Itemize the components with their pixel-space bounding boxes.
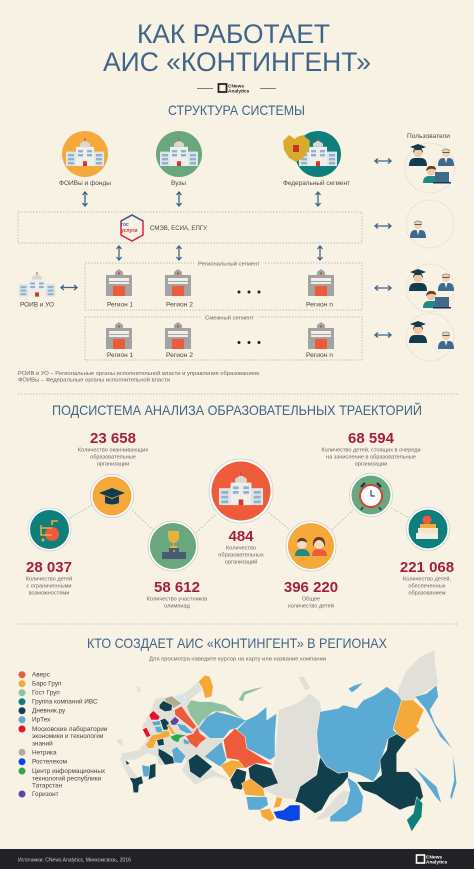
legend: Ростелеком	[32, 759, 67, 766]
map: western regions	[125, 675, 265, 793]
panel: adjacent segment	[85, 314, 362, 360]
arrow: adjacent users	[375, 332, 391, 338]
stat: children total: количество детей	[288, 602, 334, 610]
panel: adjacent segment: Регион 1	[107, 352, 133, 359]
legend: Татарстан	[32, 782, 63, 790]
stat: disabilities: Количество детей	[26, 576, 72, 582]
node: regional authorities	[19, 272, 55, 308]
map of Russia	[117, 650, 457, 832]
legend: Барс Груп	[32, 681, 62, 688]
users group: top	[405, 134, 455, 193]
legend: Группа компаний ИВС	[32, 698, 98, 706]
map: light blue regions	[198, 683, 457, 822]
map: dark regions	[230, 733, 423, 813]
subheading: map hint: Для просмотра наведите курсор на карту или название компании	[149, 656, 326, 662]
heading: regions: КТО СОЗДАЕТ АИС «КОНТИНГЕНТ» В РЕГИОНАХ	[87, 635, 388, 651]
footer: CNews	[426, 854, 442, 860]
stat: queue: 68 594	[348, 430, 395, 447]
title: АИС «КОНТИНГЕНТ»	[103, 47, 371, 77]
users group: adjacent	[406, 313, 454, 361]
arrow: regional users	[375, 286, 391, 290]
panel: regional segment: Регион 1	[107, 302, 133, 308]
legend: ИрТех	[32, 717, 51, 724]
footer: Analytics	[426, 860, 448, 866]
panel: adjacent segment: Регион n	[306, 352, 333, 359]
node: universities	[156, 131, 202, 187]
legend: Московские лаборатории	[32, 725, 108, 733]
stat: olympiad participants	[147, 521, 207, 610]
stat: graduates: образовательные	[90, 454, 136, 460]
users group: top: Пользователи	[407, 134, 450, 140]
stat: organizations	[209, 459, 273, 566]
panel: regional segment: Регион 2	[166, 302, 193, 308]
legend: экономики и технологии	[32, 733, 104, 740]
stat: provided with education	[400, 508, 454, 596]
stat: olympiad participants: олимпиад	[164, 604, 191, 610]
map: orange regions	[220, 700, 424, 822]
stat: graduates: 23 658	[90, 430, 136, 447]
node: universities: Вузы	[171, 181, 186, 187]
stat: provided with education: образованием	[408, 590, 446, 596]
title: КАК РАБОТАЕТ	[137, 19, 330, 49]
footnote: РОИВ и УО – Региональные органы исполнительной власти и управления образованием	[18, 370, 260, 377]
panel: integration box	[18, 212, 362, 243]
map: Tuva	[273, 805, 300, 822]
arrow: regional authorities	[61, 285, 77, 290]
logo: CNews Analytics: Analytics	[228, 88, 250, 94]
node: regional authorities: РОИВ и УО	[20, 302, 54, 308]
heading: trajectories: ПОДСИСТЕМА АНАЛИЗА ОБРАЗОВАТЕЛЬНЫХ ТРАЕКТОРИЙ	[52, 401, 422, 418]
stat: provided with education: Количество детей,	[403, 576, 451, 582]
stat: organizations: Количество	[226, 546, 256, 552]
stat: children total: 396 220	[284, 579, 338, 596]
panel: regional segment: Региональный сегмент	[198, 260, 261, 268]
arrow: integration box to official	[375, 224, 391, 228]
user: official	[406, 200, 454, 248]
heading: structure: СТРУКТУРА СИСТЕМЫ	[168, 102, 305, 118]
map: Sakhalin	[407, 797, 423, 832]
stat: organizations: организаций	[225, 558, 257, 566]
panel: regional segment	[85, 260, 362, 310]
stat: queue: на зачисление в образовательные	[326, 454, 416, 460]
stat: organizations: 484	[228, 528, 254, 545]
stat: provided with education: обеспеченных	[408, 584, 446, 590]
legend: Нетрика	[32, 749, 57, 756]
stat: children total: Общее	[302, 596, 320, 602]
map: unassigned regions west	[117, 682, 228, 785]
panel: adjacent segment: Смежный сегмент	[205, 314, 255, 322]
stat: disabilities	[26, 508, 72, 596]
stat: olympiad participants: Количество участников	[147, 596, 207, 602]
logo: CNews Analytics: CNews	[228, 84, 244, 90]
legend: Горизонт	[32, 791, 59, 798]
stat: queue: организации	[355, 462, 387, 468]
stat: provided with education: 221 068	[400, 559, 454, 576]
stat: queue	[321, 430, 421, 516]
legend: Центр информационных	[32, 768, 106, 775]
legend: Аверс	[32, 672, 51, 679]
panel: integration box: СМЭВ, ЕСИА, ЕПГУ	[150, 225, 208, 232]
stat: organizations: образовательных	[218, 552, 264, 558]
legend	[18, 671, 108, 798]
map: unassigned regions east	[265, 650, 438, 820]
stat: disabilities: 28 037	[26, 559, 72, 576]
stat: graduates	[78, 430, 148, 518]
arrow: users top	[375, 158, 391, 164]
panel: regional segment: Регион n	[306, 302, 333, 308]
legend: Гост Груп	[32, 690, 60, 697]
title	[103, 19, 371, 77]
footer	[0, 849, 474, 869]
node: federal bodies	[59, 131, 111, 187]
logo: CNews Analytics	[197, 84, 276, 94]
stat: olympiad participants: 58 612	[154, 579, 200, 596]
legend: знаний	[32, 740, 53, 748]
panel: integration box: услуги	[121, 228, 137, 234]
footnote: ФОИВы – Федеральные органы исполнительной власти	[18, 376, 170, 384]
arrows: top row to middle box	[82, 192, 320, 206]
users group: regional	[406, 264, 454, 312]
panel: integration box: гос	[121, 222, 129, 228]
panel: adjacent segment: Регион 2	[166, 352, 193, 359]
arrows: middle box to regions	[116, 246, 322, 260]
stat: disabilities: возможностями	[29, 590, 69, 596]
stat: children total	[284, 521, 338, 610]
node: federal bodies: ФОИВы и фонды	[59, 181, 111, 187]
stat: graduates: Количество оканчивающих	[78, 448, 148, 454]
node: federal segment: Федеральный сегмент	[283, 180, 350, 187]
legend: технологий республики	[32, 774, 102, 782]
footer: Источники: CNews Analytics, Минкомсвязь, 2016	[18, 858, 131, 864]
stat: queue: Количество детей, стоящих в очереди	[321, 446, 421, 454]
node: federal segment	[283, 131, 350, 187]
map: Khanty-Mansi region	[223, 728, 273, 768]
stat: graduates: организации	[97, 462, 129, 468]
footnote	[18, 370, 260, 384]
stat: disabilities: с ограниченными	[26, 584, 72, 590]
legend: Дневник.ру	[32, 708, 66, 715]
